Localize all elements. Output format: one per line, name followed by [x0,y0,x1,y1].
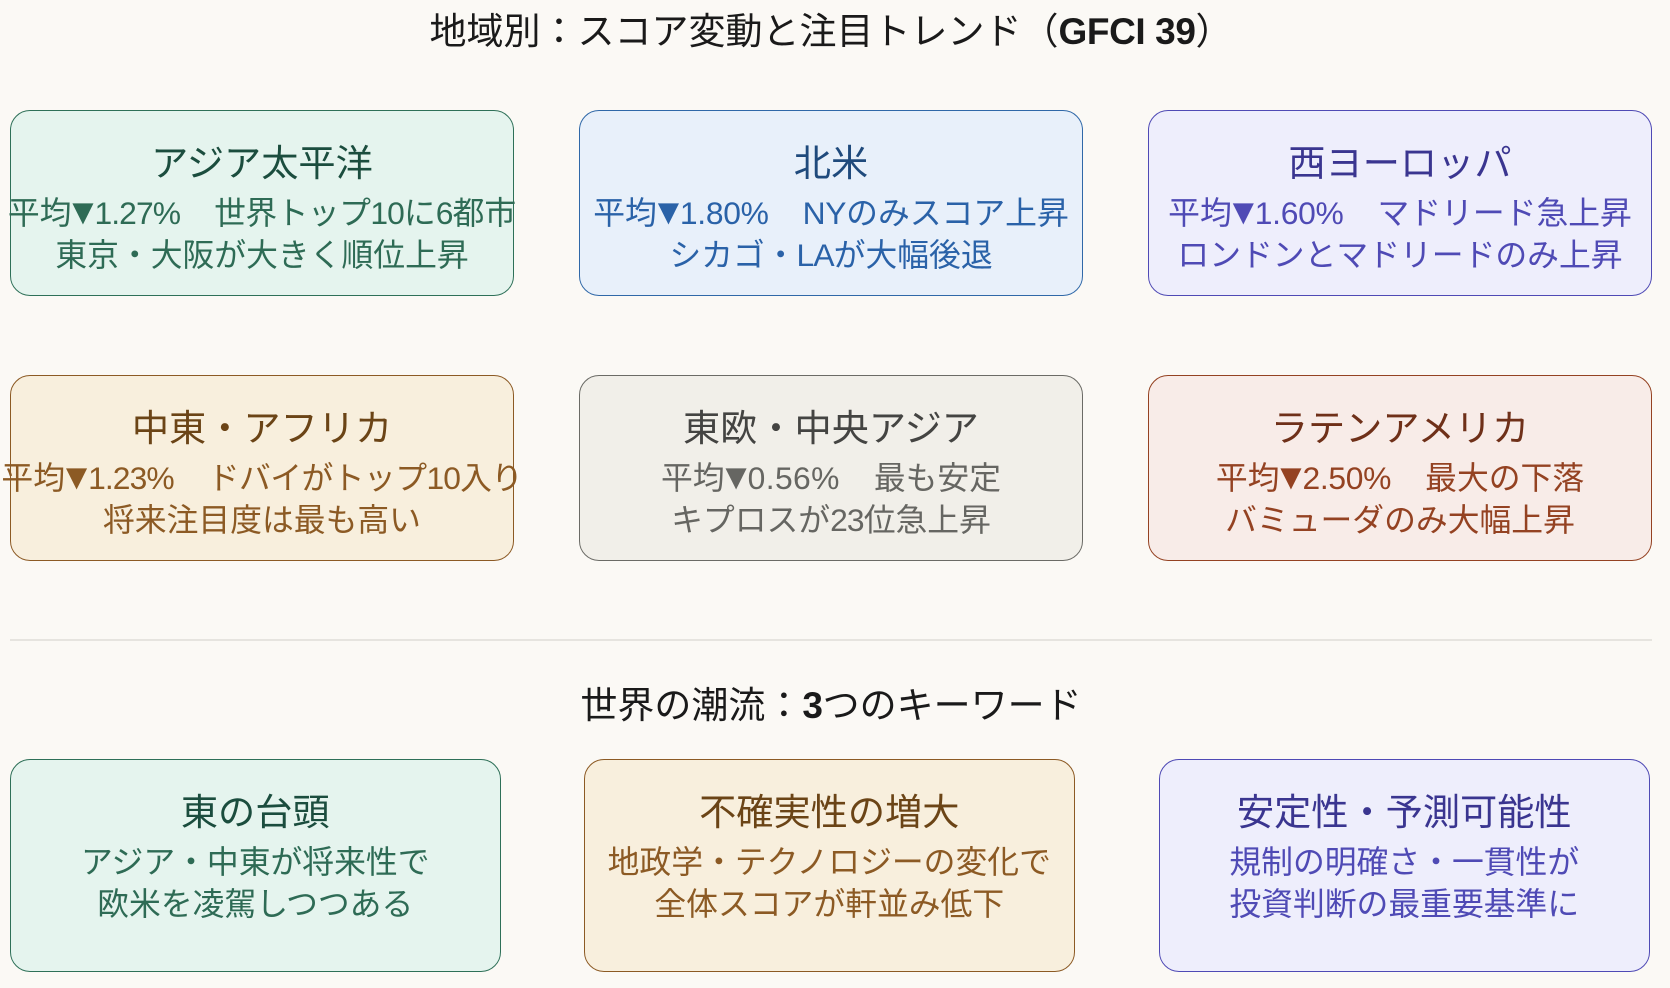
panel text line 2: 欧米を凌駕しつつある [97,886,413,922]
panel: North America [579,110,1083,296]
panel text line 2: 投資判断の最重要基準に [1229,886,1579,922]
panel heading: 中東・アフリカ [132,407,392,449]
panel heading: アジア太平洋 [151,142,373,184]
panel: growing uncertainty [584,759,1074,972]
panel heading: 西ヨーロッパ [1288,142,1512,184]
panel text line 2: キプロスが23位急上昇 [671,502,991,538]
panel text line 1: 規制の明確さ・一貫性が [1229,844,1579,880]
panel: Asia Pacific [10,110,514,296]
panel text line 2: バミューダのみ大幅上昇 [1225,502,1575,538]
panel text line 1: 平均▼1.60% マドリード急上昇 [1168,191,1632,232]
panel: Middle East and Africa [10,375,514,561]
panel text line 1: 平均▼1.80% NYのみスコア上昇 [593,191,1069,232]
panel heading: 北米 [794,142,868,184]
panel text line 1: 平均▼1.23% ドバイがトップ10入り [1,456,523,497]
panel: Latin America [1148,375,1652,561]
panel text line 1: 平均▼1.27% 世界トップ10に6都市 [8,191,516,232]
panel heading: 安定性・予測可能性 [1237,791,1572,833]
panel text line 1: 地政学・テクノロジーの変化で [608,844,1051,880]
panel text line 2: 全体スコアが軒並み低下 [654,886,1004,922]
section heading: three keywords: 世界の潮流：3つのキーワード [580,685,1082,726]
panel text line 1: 平均▼2.50% 最大の下落 [1216,456,1584,497]
panel: Eastern Europe and Central Asia [579,375,1083,561]
panel text line 2: ロンドンとマドリードのみ上昇 [1177,237,1623,273]
panel text line 2: 将来注目度は最も高い [103,502,421,538]
panel text line 1: 平均▼0.56% 最も安定 [661,456,1001,497]
panel text line 2: シカゴ・LAが大幅後退 [669,237,993,273]
panel heading: 東欧・中央アジア [683,407,979,449]
title: 地域別：スコア変動と注目トレンド（GFCI 39） [429,11,1233,52]
panel text line 2: 東京・大阪が大きく順位上昇 [55,237,469,273]
panel: Western Europe [1148,110,1652,296]
panel: stability and predictability [1159,759,1650,972]
panel text line 1: アジア・中東が将来性で [81,844,430,880]
panel heading: 不確実性の増大 [699,791,959,833]
panel: rise of the East [10,759,500,972]
panel heading: 東の台頭 [181,791,330,833]
panel heading: ラテンアメリカ [1271,407,1529,449]
